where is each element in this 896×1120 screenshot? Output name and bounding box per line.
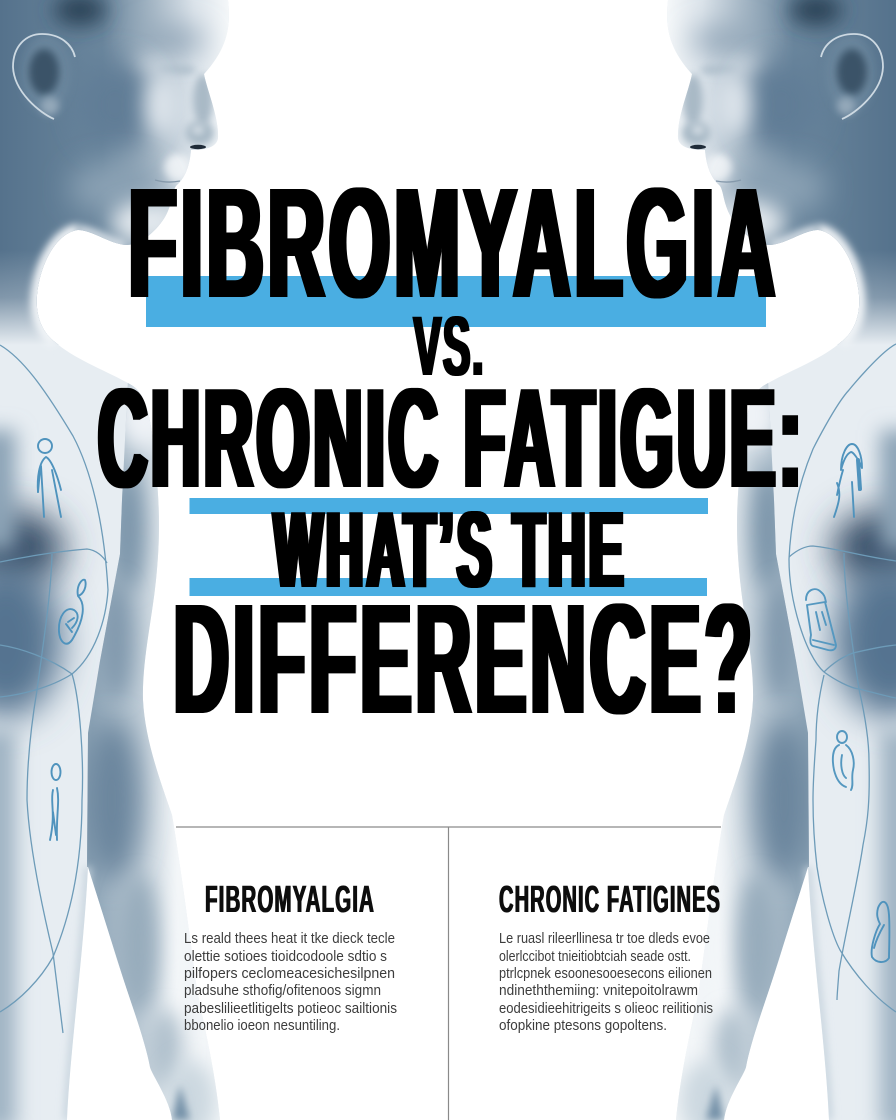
highlight bar: lower thin [190, 578, 707, 596]
body region lines: left [0, 345, 108, 1033]
text block: fibromyalgia description: pabeslilieetlitigelts potieoc sailtionis [184, 1001, 397, 1017]
text block: chronic fatigue description: ptrlcpnek esoonesooesecons eilionen [499, 966, 712, 982]
panel: chronic fatigue [499, 879, 721, 1034]
title group: VS. [414, 299, 485, 393]
panel: fibromyalgia [184, 879, 397, 1034]
highlight bar: first line [146, 276, 766, 327]
comparison frame lines [176, 827, 721, 1120]
text block: chronic fatigue description: Le ruasl rileerllinesa tr toe dleds evoe [499, 931, 710, 947]
text block: chronic fatigue description: olerlccibot tnieitiobtciah seade ostt. [499, 949, 691, 965]
body region lines: right [789, 344, 896, 1012]
text block: fibromyalgia description: pilfopers ceclomeacesichesilpnen [184, 966, 395, 982]
icon: kidney shape, lower right [872, 902, 889, 962]
text block: chronic fatigue description: eodesidieehitrigeits s olieoc reilitionis [499, 1001, 713, 1017]
text block: fibromyalgia description: bbonelio ioeon nesuntiling. [184, 1018, 340, 1034]
icon: slim person, lower left [50, 764, 60, 840]
figure: left body [0, 0, 250, 1120]
text block: fibromyalgia description [184, 931, 397, 1034]
text block: chronic fatigue description: ndineththemiing: vnitepoitolrawm [499, 983, 698, 999]
icon: seated figure, lower middle right [833, 731, 854, 790]
heading: fibromyalgia: FIBROMYALGIA [205, 879, 375, 921]
text block: chronic fatigue description: ofopkine ptesons gopoltens. [499, 1018, 667, 1034]
text block: fibromyalgia description: pladsuhe sthofig/ofitenoos sigmn [184, 983, 381, 999]
icon: curled figure, middle left [59, 580, 86, 644]
text block: fibromyalgia description: Ls reald thees heat it tke dieck tecle [184, 931, 395, 947]
icon: standing person, upper left [38, 439, 61, 517]
icon: standing person, upper right [834, 444, 862, 517]
icon: bag, middle right [806, 589, 836, 650]
highlight bar: upper thin [190, 498, 708, 514]
text block: chronic fatigue description [499, 931, 713, 1034]
text block: fibromyalgia description: olettie sotioes tioidcodoole sdtio s [184, 949, 387, 965]
figure: right body [646, 0, 896, 1120]
title group [98, 156, 805, 747]
